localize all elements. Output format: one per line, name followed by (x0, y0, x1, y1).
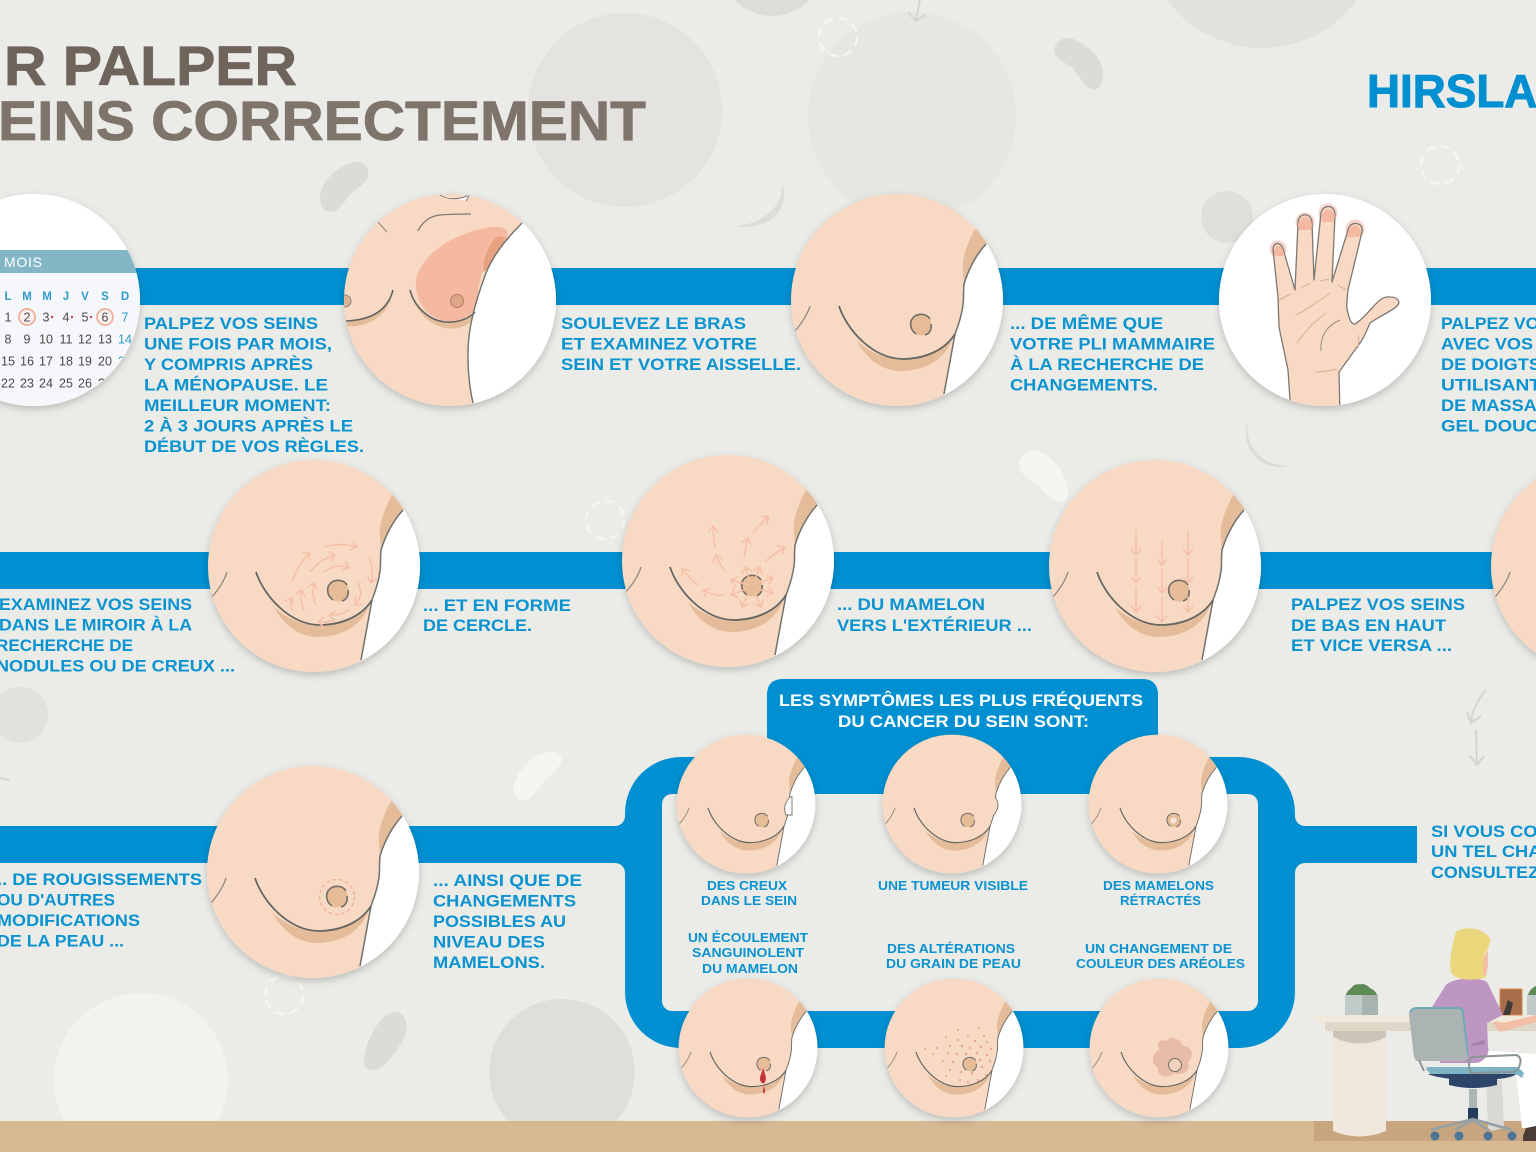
text blocks: row 3: CHANGEMENTS (433, 892, 576, 910)
symptom: areola colour change (1087, 976, 1234, 1123)
text blocks: row 1 (144, 314, 1536, 456)
step: calendar: 9 (24, 332, 31, 346)
symptom labels: UN CHANGEMENT DE (1085, 941, 1232, 956)
step: calendar: 12 (78, 332, 92, 346)
symptom: bloody discharge (676, 976, 823, 1123)
step: calendar: 13 (98, 332, 112, 346)
title: EINS CORRECTEMENT (0, 89, 646, 152)
step: calendar: S (101, 291, 109, 303)
step: circular palpation (204, 456, 429, 681)
step: calendar: 2 (24, 310, 31, 324)
step: calendar: 19 (78, 354, 92, 368)
step: redness (203, 762, 428, 987)
text blocks: row 3 (0, 822, 1536, 972)
step: calendar: 6 (102, 310, 109, 324)
text blocks: row 2: DANS LE MIROIR À LA (0, 616, 192, 634)
icon: dashed nipple halo (320, 880, 354, 914)
text blocks: row 3: CONSULTEZ (1431, 863, 1536, 882)
text blocks: row 1: ET EXAMINEZ VOTRE (561, 334, 757, 354)
icon: hand (1273, 206, 1399, 415)
step: calendar: 14 (118, 332, 132, 346)
text blocks: row 2: ET VICE VERSA ... (1291, 636, 1452, 655)
text blocks: row 2 (0, 595, 1465, 676)
step: calendar: M (22, 291, 32, 303)
step: calendar: 21 (118, 354, 132, 368)
symptom: visible lump (880, 732, 1027, 879)
step: calendar: 18 (59, 354, 73, 368)
text blocks: row 3: MAMELONS. (433, 953, 545, 972)
symptom labels: DES MAMELONS (1103, 878, 1214, 893)
step: calendar: 23 (20, 376, 34, 390)
step: calendar: J (63, 291, 69, 303)
process bars (0, 268, 1536, 873)
step: calendar: 24 (39, 376, 53, 390)
step: calendar: L (4, 291, 12, 303)
text blocks: row 1: SEIN ET VOTRE AISSELLE. (561, 355, 801, 374)
text blocks: row 3: OU D'AUTRES (0, 890, 115, 910)
symptom labels: DU MAMELON (702, 961, 798, 976)
step: calendar (0, 194, 150, 413)
symptom labels: UN ÉCOULEMENT (688, 930, 808, 945)
chair (1409, 1008, 1468, 1061)
step: calendar: M (42, 291, 52, 303)
text blocks: row 2: RECHERCHE DE (0, 636, 133, 655)
symptom: skin texture (882, 976, 1029, 1123)
text blocks: row 1: DE DOIGTS (1441, 355, 1536, 374)
desk (1333, 1031, 1386, 1136)
step: calendar: 7 (122, 310, 129, 324)
step: calendar: 1 (5, 310, 12, 324)
text blocks: row 3: ... AINSI QUE DE (433, 871, 582, 890)
step: calendar: 5 (82, 310, 89, 324)
step: calendar: 20 (98, 354, 112, 368)
back leg (1486, 1080, 1504, 1131)
icon: vertical arrows (1136, 530, 1188, 622)
step: calendar: 11 (60, 332, 73, 346)
step: calendar: 17 (39, 354, 53, 368)
plants (1346, 984, 1377, 995)
symptom: retracted nipple (1086, 732, 1233, 879)
illustration: woman at desk (1314, 928, 1536, 1141)
title (0, 34, 646, 152)
step: calendar: 26 (78, 376, 92, 390)
symptom labels (688, 878, 1245, 976)
floor (0, 1121, 1536, 1152)
symptom labels: DES ALTÉRATIONS (887, 941, 1015, 956)
step: calendar: 25 (59, 376, 73, 390)
step: calendar: 3 (43, 310, 50, 324)
step: calendar: 27 (98, 376, 112, 390)
symptom: dimples (674, 732, 821, 879)
text blocks: row 1: AVEC VOS (1441, 334, 1533, 354)
next step circle (cropped) (1487, 456, 1536, 681)
text blocks: row 2: EXAMINEZ VOS SEINS (0, 595, 192, 614)
text blocks: row 1: PALPEZ VOS SEINS (144, 314, 318, 333)
step: calendar: 22 (1, 376, 15, 390)
step: raised arm (339, 190, 570, 410)
text blocks: row 3: NIVEAU DES (433, 932, 545, 952)
icon: radial arrows (682, 517, 785, 607)
symptoms frame (625, 679, 1295, 1048)
text blocks: row 1: DÉBUT DE VOS RÈGLES. (144, 437, 364, 456)
title: R PALPER (4, 34, 297, 97)
front leg and thigh (1470, 1051, 1536, 1128)
text blocks: row 2: DE BAS EN HAUT (1291, 616, 1447, 635)
symptom labels: DANS LE SEIN (701, 893, 797, 908)
step: calendar: V (81, 291, 89, 303)
text blocks: row 2: ... DU MAMELON (837, 595, 985, 614)
step: breast fold (787, 190, 1012, 415)
symptom labels: UNE TUMEUR VISIBLE (878, 878, 1028, 893)
symptoms heading (779, 691, 1143, 731)
step: calendar: 16 (20, 354, 34, 368)
text blocks: row 3: MODIFICATIONS (0, 911, 140, 930)
step: calendar: 4 (63, 310, 70, 324)
step: calendar: 10 (39, 332, 53, 346)
text blocks: row 2: ... ET EN FORME (423, 596, 571, 615)
step: calendar: D (121, 291, 129, 303)
text blocks: row 1: CHANGEMENTS. (1010, 376, 1158, 394)
text blocks: row 2: DE CERCLE. (423, 616, 532, 635)
symptoms heading: DU CANCER DU SEIN SONT: (838, 712, 1089, 731)
text blocks: row 1: UNE FOIS PAR MOIS, (144, 334, 332, 354)
text blocks: row 1: UTILISANT (1441, 376, 1536, 394)
text blocks: row 1: Y COMPRIS APRÈS (144, 355, 313, 374)
text blocks: row 3: DE LA PEAU ... (0, 932, 124, 950)
text blocks: row 1: VOTRE PLI MAMMAIRE (1010, 334, 1215, 354)
icon: fingertips (1270, 204, 1364, 258)
step: hand (1219, 194, 1431, 415)
text blocks: row 1: MEILLEUR MOMENT: (144, 396, 331, 415)
step: radial palpation (618, 451, 843, 676)
text blocks: row 1: SOULEVEZ LE BRAS (561, 314, 746, 333)
icon: swirl arrows (290, 545, 372, 622)
step: vertical palpation (1045, 456, 1270, 681)
step: calendar: 8 (5, 332, 12, 346)
text blocks: row 3: POSSIBLES AU (433, 912, 566, 931)
text blocks: row 2: NODULES OU DE CREUX ... (0, 656, 235, 676)
symptom labels: DES CREUX (707, 878, 787, 893)
photo frame (1500, 989, 1522, 1015)
text blocks: row 1: 2 À 3 JOURS APRÈS LE (144, 416, 353, 436)
symptoms heading: LES SYMPTÔMES LES PLUS FRÉQUENTS (779, 691, 1143, 710)
symptom labels: COULEUR DES ARÉOLES (1076, 956, 1245, 971)
text blocks: row 2: VERS L'EXTÉRIEUR ... (837, 616, 1032, 635)
symptom labels: DU GRAIN DE PEAU (886, 956, 1021, 971)
symptom labels: RÉTRACTÉS (1120, 893, 1201, 908)
text blocks: row 1: ... DE MÊME QUE (1010, 314, 1163, 333)
step: calendar: 15 (1, 354, 15, 368)
symptom labels: SANGUINOLENT (692, 945, 804, 960)
text blocks: row 1: À LA RECHERCHE DE (1010, 355, 1204, 374)
text blocks: row 1: LA MÉNOPAUSE. LE (144, 376, 328, 394)
text blocks: row 2: PALPEZ VOS SEINS (1291, 595, 1465, 614)
hair (1450, 928, 1490, 980)
shirt (1432, 978, 1503, 1063)
step: calendar: MOIS (4, 254, 42, 270)
